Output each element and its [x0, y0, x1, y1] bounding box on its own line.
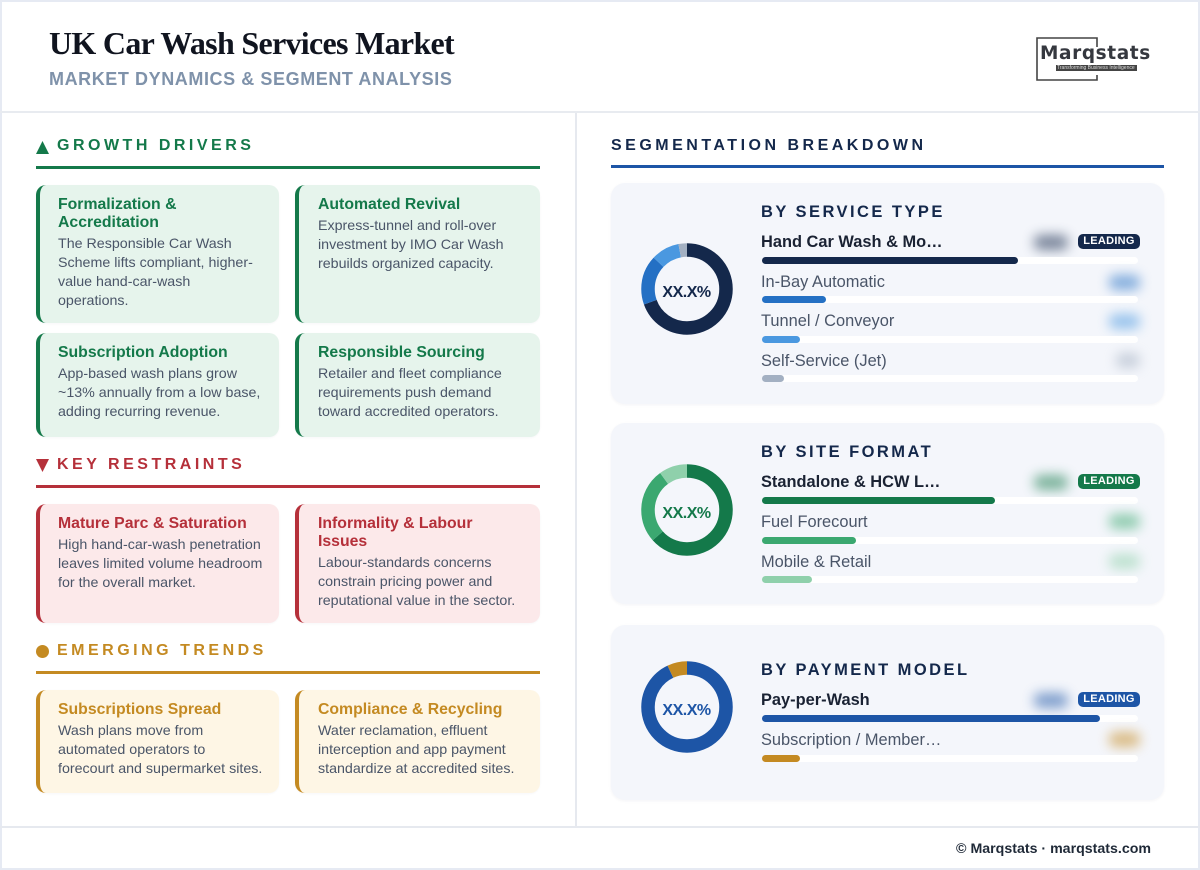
row label: mobile and retail: Mobile & Retail	[761, 553, 871, 571]
panel: by payment model	[611, 625, 1164, 800]
card: mature parc: Mature Parc & Saturation	[58, 515, 247, 532]
badge: leading	[1078, 474, 1140, 489]
logo	[1036, 37, 1151, 81]
card: subscriptions spread: Wash plans move from	[58, 723, 203, 739]
heading: segmentation breakdown: SEGMENTATION BREAKDOWN	[611, 137, 927, 154]
card: automated revival: rebuilds organized capacity.	[318, 256, 494, 272]
card: informality: Issues	[318, 533, 367, 550]
badge: leading: LEADING	[1083, 235, 1135, 247]
panel heading: service type: BY SERVICE TYPE	[761, 203, 945, 221]
donut: site format	[641, 464, 733, 556]
bar: pay-per-wash	[762, 715, 1138, 722]
bar: hand car wash	[762, 257, 1138, 264]
donut: service type	[641, 243, 733, 335]
value: pay-per-wash: XX.X%	[1034, 694, 1068, 706]
card: subscription adoption: ~13% annually from a low base,	[58, 385, 260, 401]
logo: Transforming Business Intelligence	[1057, 65, 1135, 71]
title: UK Car Wash Services Market	[49, 25, 454, 61]
icon: up triangle	[36, 141, 49, 154]
card: formalization: Scheme lifts compliant, higher-	[58, 255, 253, 271]
heading: emerging trends: EMERGING TRENDS	[57, 642, 267, 659]
card: automated revival: investment by IMO Car Wash	[318, 237, 504, 253]
donut: service type: XX.X%	[662, 284, 711, 301]
bar: self-service	[762, 375, 1138, 382]
panel: by service type	[611, 183, 1164, 404]
card: mature parc	[36, 504, 279, 623]
card: formalization	[36, 185, 279, 323]
logo: Marqstats	[1040, 43, 1151, 64]
card: subscription adoption: Subscription Adoption	[58, 344, 228, 361]
card: formalization: value hand-car-wash	[58, 274, 190, 290]
card: responsible sourcing	[295, 333, 540, 437]
heading: key restraints: KEY RESTRAINTS	[57, 456, 245, 473]
row label: self-service: Self-Service (Jet)	[761, 352, 887, 370]
card: responsible sourcing: Responsible Sourcing	[318, 344, 485, 361]
heading: growth drivers: GROWTH DRIVERS	[57, 137, 254, 154]
row label: fuel forecourt: Fuel Forecourt	[761, 513, 868, 531]
donut: payment model: XX.X%	[662, 702, 711, 719]
bar: subscription	[762, 755, 1138, 762]
card: formalization: Formalization &	[58, 196, 176, 213]
card: subscription adoption: App-based wash plans grow	[58, 366, 237, 382]
bar: tunnel	[762, 336, 1138, 343]
card: automated revival	[295, 185, 540, 323]
card: compliance	[295, 690, 540, 793]
card: subscriptions spread	[36, 690, 279, 793]
card: formalization: Accreditation	[58, 214, 159, 231]
footer text: © Marqstats · marqstats.com	[956, 841, 1151, 857]
badge: leading	[1078, 234, 1140, 249]
card: compliance: Compliance & Recycling	[318, 701, 502, 718]
row label: tunnel: Tunnel / Conveyor	[761, 312, 894, 330]
card: responsible sourcing: toward accredited operators.	[318, 404, 499, 420]
card: informality	[295, 504, 540, 623]
row label: in-bay: In-Bay Automatic	[761, 273, 885, 291]
footer divider	[0, 826, 1200, 828]
donut: site format: XX.X%	[662, 505, 711, 522]
row label: hand car wash: Hand Car Wash & Mo…	[761, 233, 943, 251]
panel heading: payment model: BY PAYMENT MODEL	[761, 661, 970, 679]
card: responsible sourcing: Retailer and fleet compliance	[318, 366, 502, 382]
card: subscriptions spread: forecourt and supermarket sites.	[58, 761, 262, 777]
column divider	[575, 111, 577, 826]
badge: leading: LEADING	[1083, 475, 1135, 487]
card: responsible sourcing: requirements push demand	[318, 385, 491, 401]
panel heading: site format: BY SITE FORMAT	[761, 443, 933, 461]
card: mature parc: for the overall market.	[58, 575, 196, 591]
card: subscriptions spread: automated operators to	[58, 742, 205, 758]
card: subscription adoption	[36, 333, 279, 437]
card: formalization: operations.	[58, 293, 129, 309]
header divider	[0, 111, 1200, 113]
row label: pay-per-wash: Pay-per-Wash	[761, 691, 870, 709]
panel: by site format	[611, 423, 1164, 604]
row label: subscription: Subscription / Member…	[761, 731, 941, 749]
card: informality: Informality & Labour	[318, 515, 472, 532]
value: hand car wash: XX.X%	[1034, 236, 1068, 248]
card: formalization: The Responsible Car Wash	[58, 236, 232, 252]
card: compliance: standardize at accredited sites.	[318, 761, 514, 777]
card: mature parc: leaves limited volume headroom	[58, 556, 262, 572]
card: subscriptions spread: Subscriptions Spread	[58, 701, 221, 718]
row label: standalone: Standalone & HCW L…	[761, 473, 940, 491]
icon: circle	[36, 645, 49, 658]
card: compliance: Water reclamation, effluent	[318, 723, 488, 739]
card: informality: reputational value in the sector.	[318, 593, 515, 609]
card: subscription adoption: adding recurring revenue.	[58, 404, 220, 420]
donut: payment model	[641, 661, 733, 753]
bar: standalone	[762, 497, 1138, 504]
badge: leading	[1078, 692, 1140, 707]
card: automated revival: Express-tunnel and roll-over	[318, 218, 496, 234]
value: self-service: XX%	[1116, 354, 1140, 366]
icon: down triangle	[36, 459, 49, 472]
bar: in-bay	[762, 296, 1138, 303]
value: standalone: XX.X%	[1034, 476, 1068, 488]
bar: fuel forecourt	[762, 537, 1138, 544]
badge: leading: LEADING	[1083, 693, 1135, 705]
card: mature parc: High hand-car-wash penetration	[58, 537, 261, 553]
subtitle: MARKET DYNAMICS & SEGMENT ANALYSIS	[49, 69, 452, 89]
card: informality: Labour-standards concerns	[318, 555, 491, 571]
card: automated revival: Automated Revival	[318, 196, 460, 213]
card: informality: constrain pricing power and	[318, 574, 492, 590]
bar: mobile and retail	[762, 576, 1138, 583]
card: compliance: interception and app payment	[318, 742, 506, 758]
